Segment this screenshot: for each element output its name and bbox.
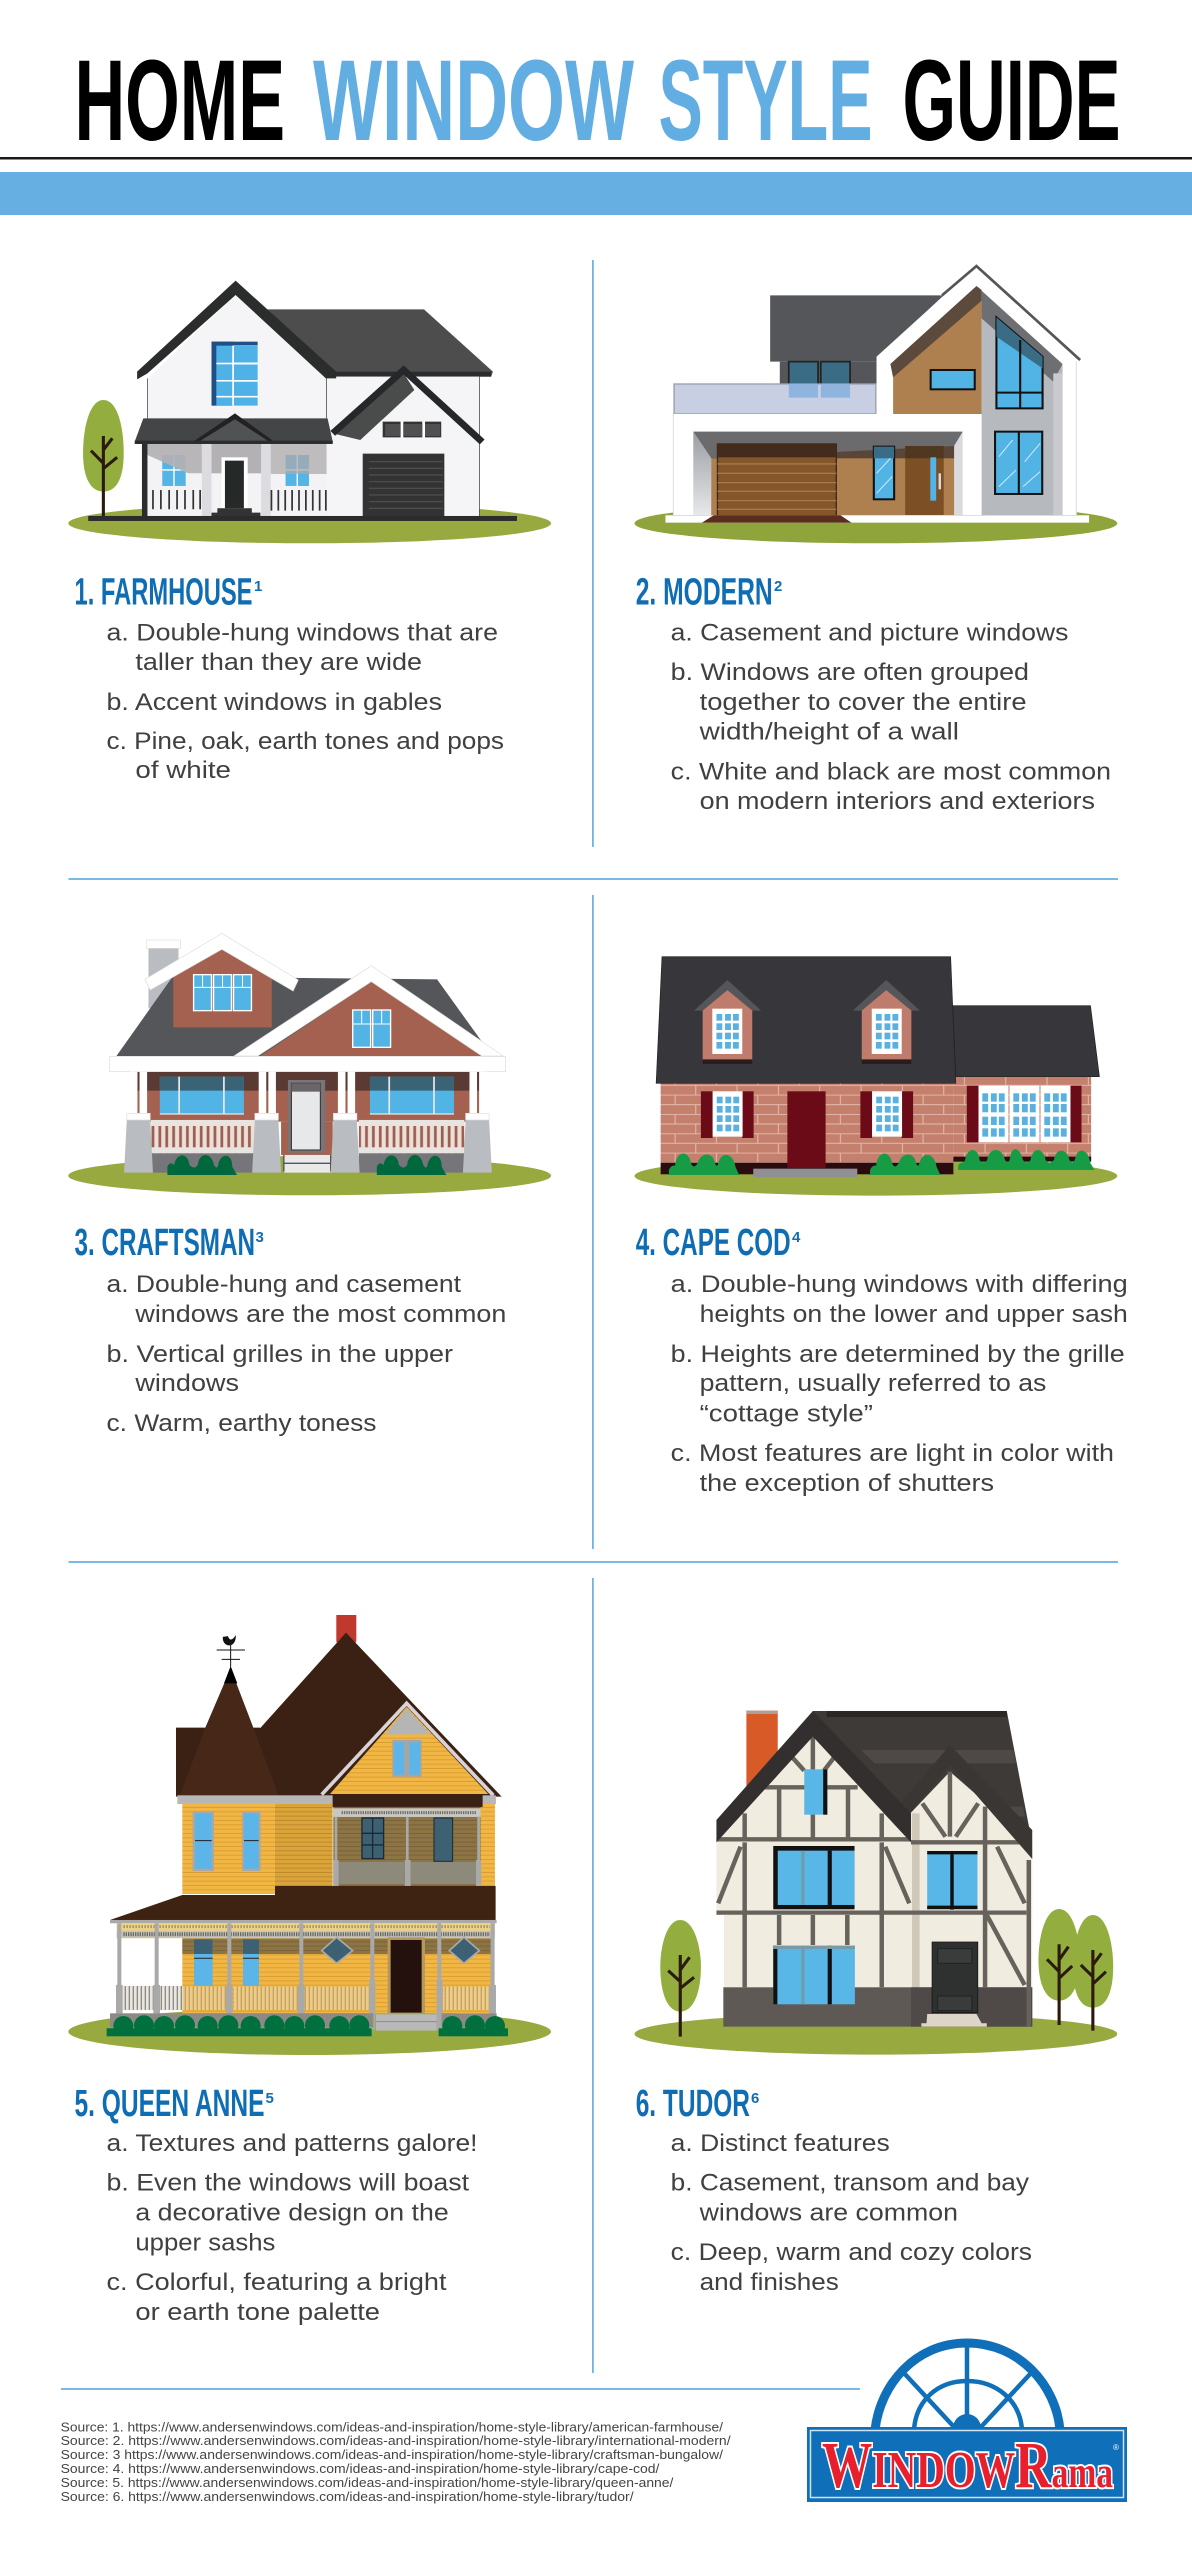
list: farmhouse: of white	[135, 757, 231, 784]
house illustration: modern	[634, 266, 1117, 543]
list: farmhouse: a. Double-hung windows that are	[106, 620, 498, 646]
logo: WindowRama: ®	[1113, 2443, 1119, 2452]
list: craftsman	[106, 1271, 506, 1437]
list: cape cod: “cottage style”	[700, 1401, 873, 1428]
ground floor	[182, 1938, 492, 2013]
title: STYLE	[658, 37, 872, 165]
garage gable	[333, 373, 414, 440]
heading: tudor: 6	[751, 2090, 759, 2107]
sources: Source: 3 https://www.andersenwindows.com/ideas-and-inspiration/home-style-library/craftsman-bungalow/	[61, 2447, 723, 2462]
sources: Source: 1. https://www.andersenwindows.com/ideas-and-inspiration/home-style-library/american-farmhouse/	[61, 2420, 723, 2434]
logo: WindowRama	[807, 2343, 1127, 2502]
panel: farmhouse	[68, 281, 551, 784]
heading: cape cod: 4	[792, 1229, 801, 1246]
list: queen anne	[106, 2130, 478, 2326]
title: WINDOW	[313, 37, 634, 165]
title	[74, 37, 1120, 165]
dormers	[694, 980, 920, 1064]
house illustration: farmhouse	[68, 281, 551, 543]
heading: queen anne: 5	[266, 2090, 274, 2107]
list: tudor	[671, 2130, 1032, 2296]
list: tudor: a. Distinct features	[671, 2130, 890, 2157]
house illustration: queen anne	[68, 1615, 551, 2055]
list: craftsman: c. Warm, earthy toness	[106, 1410, 376, 1437]
heading: queen anne: 5. QUEEN ANNE	[74, 2083, 264, 2125]
list: queen anne: or earth tone palette	[135, 2299, 380, 2326]
porch	[142, 443, 327, 517]
heading: modern	[636, 572, 782, 614]
list: modern: on modern interiors and exteriors	[700, 788, 1095, 815]
list: modern	[671, 620, 1111, 815]
door	[932, 1942, 978, 2013]
list: cape cod: the exception of shutters	[700, 1470, 994, 1497]
heading: tudor	[636, 2083, 759, 2125]
half timbers	[716, 1737, 1030, 2027]
heading: craftsman	[74, 1222, 264, 1264]
list: tudor: c. Deep, warm and cozy colors	[671, 2239, 1032, 2266]
panel: modern	[634, 266, 1117, 815]
list: tudor: and finishes	[700, 2269, 839, 2296]
title: HOME	[74, 37, 285, 165]
porch columns	[134, 1072, 483, 1113]
list: craftsman: b. Vertical grilles in the upper	[106, 1341, 453, 1368]
panel: cape cod	[634, 957, 1128, 1497]
list: cape cod: heights on the lower and upper sash	[700, 1301, 1128, 1328]
list: queen anne: a. Textures and patterns galore!	[106, 2130, 478, 2157]
heading: farmhouse: 1. FARMHOUSE	[74, 572, 252, 614]
list: cape cod: c. Most features are light in color with	[671, 1440, 1114, 1467]
windows	[773, 1846, 855, 1909]
list: modern: together to cover the entire	[700, 689, 1027, 716]
list: cape cod: a. Double-hung windows with differing	[671, 1271, 1128, 1298]
house illustration: craftsman	[68, 933, 551, 1195]
list: farmhouse: taller than they are wide	[135, 649, 422, 676]
list: craftsman: windows	[134, 1370, 239, 1397]
sources	[61, 2420, 731, 2504]
list: cape cod: b. Heights are determined by the grille	[671, 1341, 1125, 1368]
list: craftsman: a. Double-hung and casement	[106, 1271, 461, 1298]
panel: craftsman	[68, 933, 551, 1437]
house illustration: cape cod	[634, 957, 1117, 1196]
panel: queen anne	[68, 1615, 551, 2326]
list: queen anne: c. Colorful, featuring a bright	[106, 2269, 447, 2296]
list: craftsman: windows are the most common	[134, 1301, 506, 1328]
heading: craftsman: 3	[256, 1229, 264, 1246]
list: farmhouse	[106, 620, 504, 784]
heading: farmhouse	[74, 572, 262, 614]
list: tudor: b. Casement, transom and bay	[671, 2170, 1030, 2197]
list: farmhouse: b. Accent windows in gables	[106, 689, 442, 716]
gable trim	[901, 1745, 1032, 1859]
list: farmhouse: c. Pine, oak, earth tones and pops	[106, 728, 504, 755]
list: modern: c. White and black are most common	[671, 758, 1111, 786]
list: queen anne: upper sashs	[135, 2230, 275, 2257]
house illustration: tudor	[634, 1711, 1117, 2055]
sources: Source: 2. https://www.andersenwindows.com/ideas-and-inspiration/home-style-library/international-modern/	[61, 2433, 731, 2448]
sources: Source: 4. https://www.andersenwindows.com/ideas-and-inspiration/home-style-library/cape-cod/	[61, 2461, 660, 2476]
heading: tudor: 6. TUDOR	[636, 2083, 750, 2125]
heading: cape cod	[636, 1222, 801, 1264]
list: modern: width/height of a wall	[698, 718, 959, 746]
heading: cape cod: 4. CAPE COD	[636, 1222, 791, 1264]
list: queen anne: a decorative design on the	[135, 2200, 449, 2227]
list: modern: b. Windows are often grouped	[671, 659, 1029, 686]
sources: Source: 5. https://www.andersenwindows.com/ideas-and-inspiration/home-style-library/queen-anne/	[61, 2475, 674, 2490]
sources: Source: 6. https://www.andersenwindows.com/ideas-and-inspiration/home-style-library/tudor/	[61, 2489, 634, 2504]
weathervane	[217, 1637, 245, 1667]
list: cape cod	[671, 1271, 1128, 1497]
heading: farmhouse: 1	[254, 578, 262, 595]
heading: craftsman: 3. CRAFTSMAN	[74, 1222, 255, 1264]
heading: modern: 2	[774, 578, 782, 595]
list: tudor: windows are common	[699, 2200, 958, 2227]
list: modern: a. Casement and picture windows	[671, 620, 1068, 646]
list: cape cod: pattern, usually referred to as	[700, 1370, 1046, 1397]
heading: queen anne	[74, 2083, 274, 2125]
header band	[0, 172, 1192, 215]
porch recess	[693, 432, 963, 515]
panel: tudor	[634, 1711, 1117, 2296]
list: queen anne: b. Even the windows will boast	[106, 2170, 469, 2197]
heading: modern: 2. MODERN	[636, 572, 773, 614]
logo: WindowRama: WINDOWRama	[822, 2429, 1113, 2502]
